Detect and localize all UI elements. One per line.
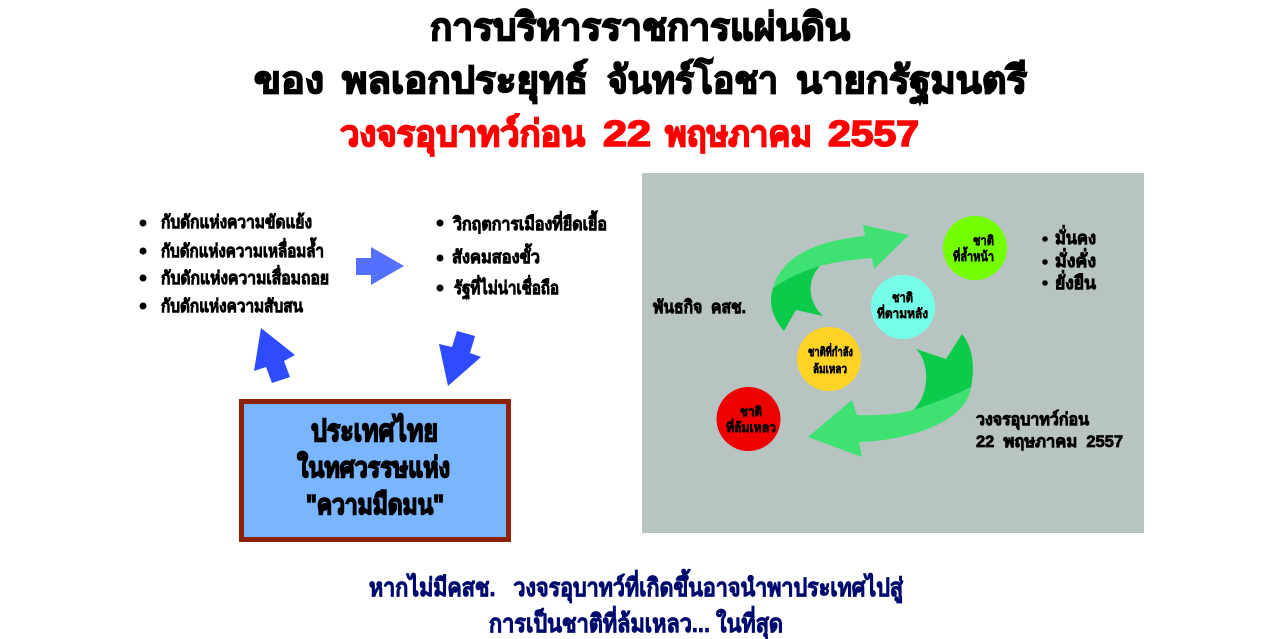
- label: vicious cycle before 22 May 2557: 22 พฤษภาคม 2557: [976, 432, 1123, 451]
- label: NCPO mission: พันธกิจ คสช.: [653, 297, 746, 317]
- title line 2: [254, 57, 1028, 105]
- subtitle in red: 2557: [828, 113, 919, 154]
- subtitle in red: 22: [603, 113, 651, 154]
- list: traps: กับดักแห่งความสับสน: [161, 296, 304, 316]
- list: traps: กับดักแห่งความเหลื่อมล้ำ: [161, 237, 324, 261]
- label: vicious cycle before 22 May 2557: [976, 409, 1123, 451]
- circle: failing nation: [797, 327, 861, 391]
- arrow: right: [356, 247, 404, 285]
- title line 2: พลเอกประยุทธ์: [342, 59, 588, 104]
- conclusion text: [369, 568, 904, 639]
- conclusion text: หากไม่มีคสช. วงจรอุบาทว์ที่เกิดขึ้นอาจนำพาประเทศไปสู่: [369, 568, 904, 604]
- panel: cycle diagram: [642, 173, 1144, 533]
- circle: failed nation: ชาติ: [740, 404, 762, 419]
- panel: Thailand box: ประเทศไทย: [311, 413, 438, 448]
- list: stability, prosperity, sustainability: ยั่งยืน: [1055, 270, 1097, 293]
- list: stability, prosperity, sustainability: มั่นคง: [1055, 225, 1096, 248]
- list: traps: กับดักแห่งความเสื่อมถอย: [161, 265, 329, 288]
- circle: failing nation: ชาติที่กำลัง: [808, 343, 853, 359]
- circle: advanced nation: ชาติ: [973, 233, 994, 248]
- arrow: lower cycle: [808, 334, 973, 457]
- circle: lagging nation: ที่ตามหลัง: [877, 304, 928, 321]
- circle: lagging nation: ชาติ: [892, 290, 913, 305]
- list: stability, prosperity, sustainability: มั่งคั่ง: [1055, 248, 1096, 271]
- list: crises: รัฐที่ไม่น่าเชื่อถือ: [454, 275, 559, 300]
- circle: advanced nation: ที่ล้ำหน้า: [953, 246, 994, 264]
- subtitle in red: พฤษภาคม: [665, 113, 812, 154]
- conclusion text: การเป็นชาติที่ล้มเหลว... ในที่สุด: [489, 606, 783, 639]
- circle: failed nation: [716, 387, 780, 451]
- list: crises: [436, 210, 607, 300]
- arrow: up-left: [254, 328, 295, 383]
- title line 2: นายกรัฐมนตรี: [796, 60, 1028, 105]
- title line 2: ของ: [254, 60, 324, 102]
- title line 1: การบริหารราชการแผ่นดิน: [430, 7, 850, 49]
- panel: Thailand box: [242, 402, 508, 540]
- list: traps: [140, 212, 329, 316]
- label: vicious cycle before 22 May 2557: วงจรอุบาทว์ก่อน: [976, 409, 1089, 430]
- list: crises: วิกฤตการเมืองที่ยืดเยื้อ: [452, 210, 607, 234]
- subtitle in red: วงจรอุบาทว์ก่อน: [340, 113, 585, 157]
- list: traps: กับดักแห่งความขัดแย้ง: [161, 212, 312, 232]
- list: crises: สังคมสองขั้ว: [452, 243, 540, 267]
- subtitle in red: [340, 113, 919, 157]
- panel: Thailand box: ในทศวรรษแห่ง: [297, 451, 450, 483]
- circle: lagging nation: [871, 275, 935, 339]
- title: [254, 7, 1028, 157]
- title line 2: จันทร์โอชา: [607, 57, 778, 102]
- circle: failed nation: ที่ล้มเหลว: [726, 418, 776, 435]
- circle: failing nation: ล้มเหลว: [813, 362, 847, 376]
- circle: advanced nation: [943, 216, 1007, 280]
- arrow: upper cycle: [771, 225, 909, 331]
- list: stability, prosperity, sustainability: [1042, 225, 1097, 293]
- arrow: down-left: [439, 331, 481, 386]
- panel: Thailand box: "ความมืดมน": [306, 489, 444, 520]
